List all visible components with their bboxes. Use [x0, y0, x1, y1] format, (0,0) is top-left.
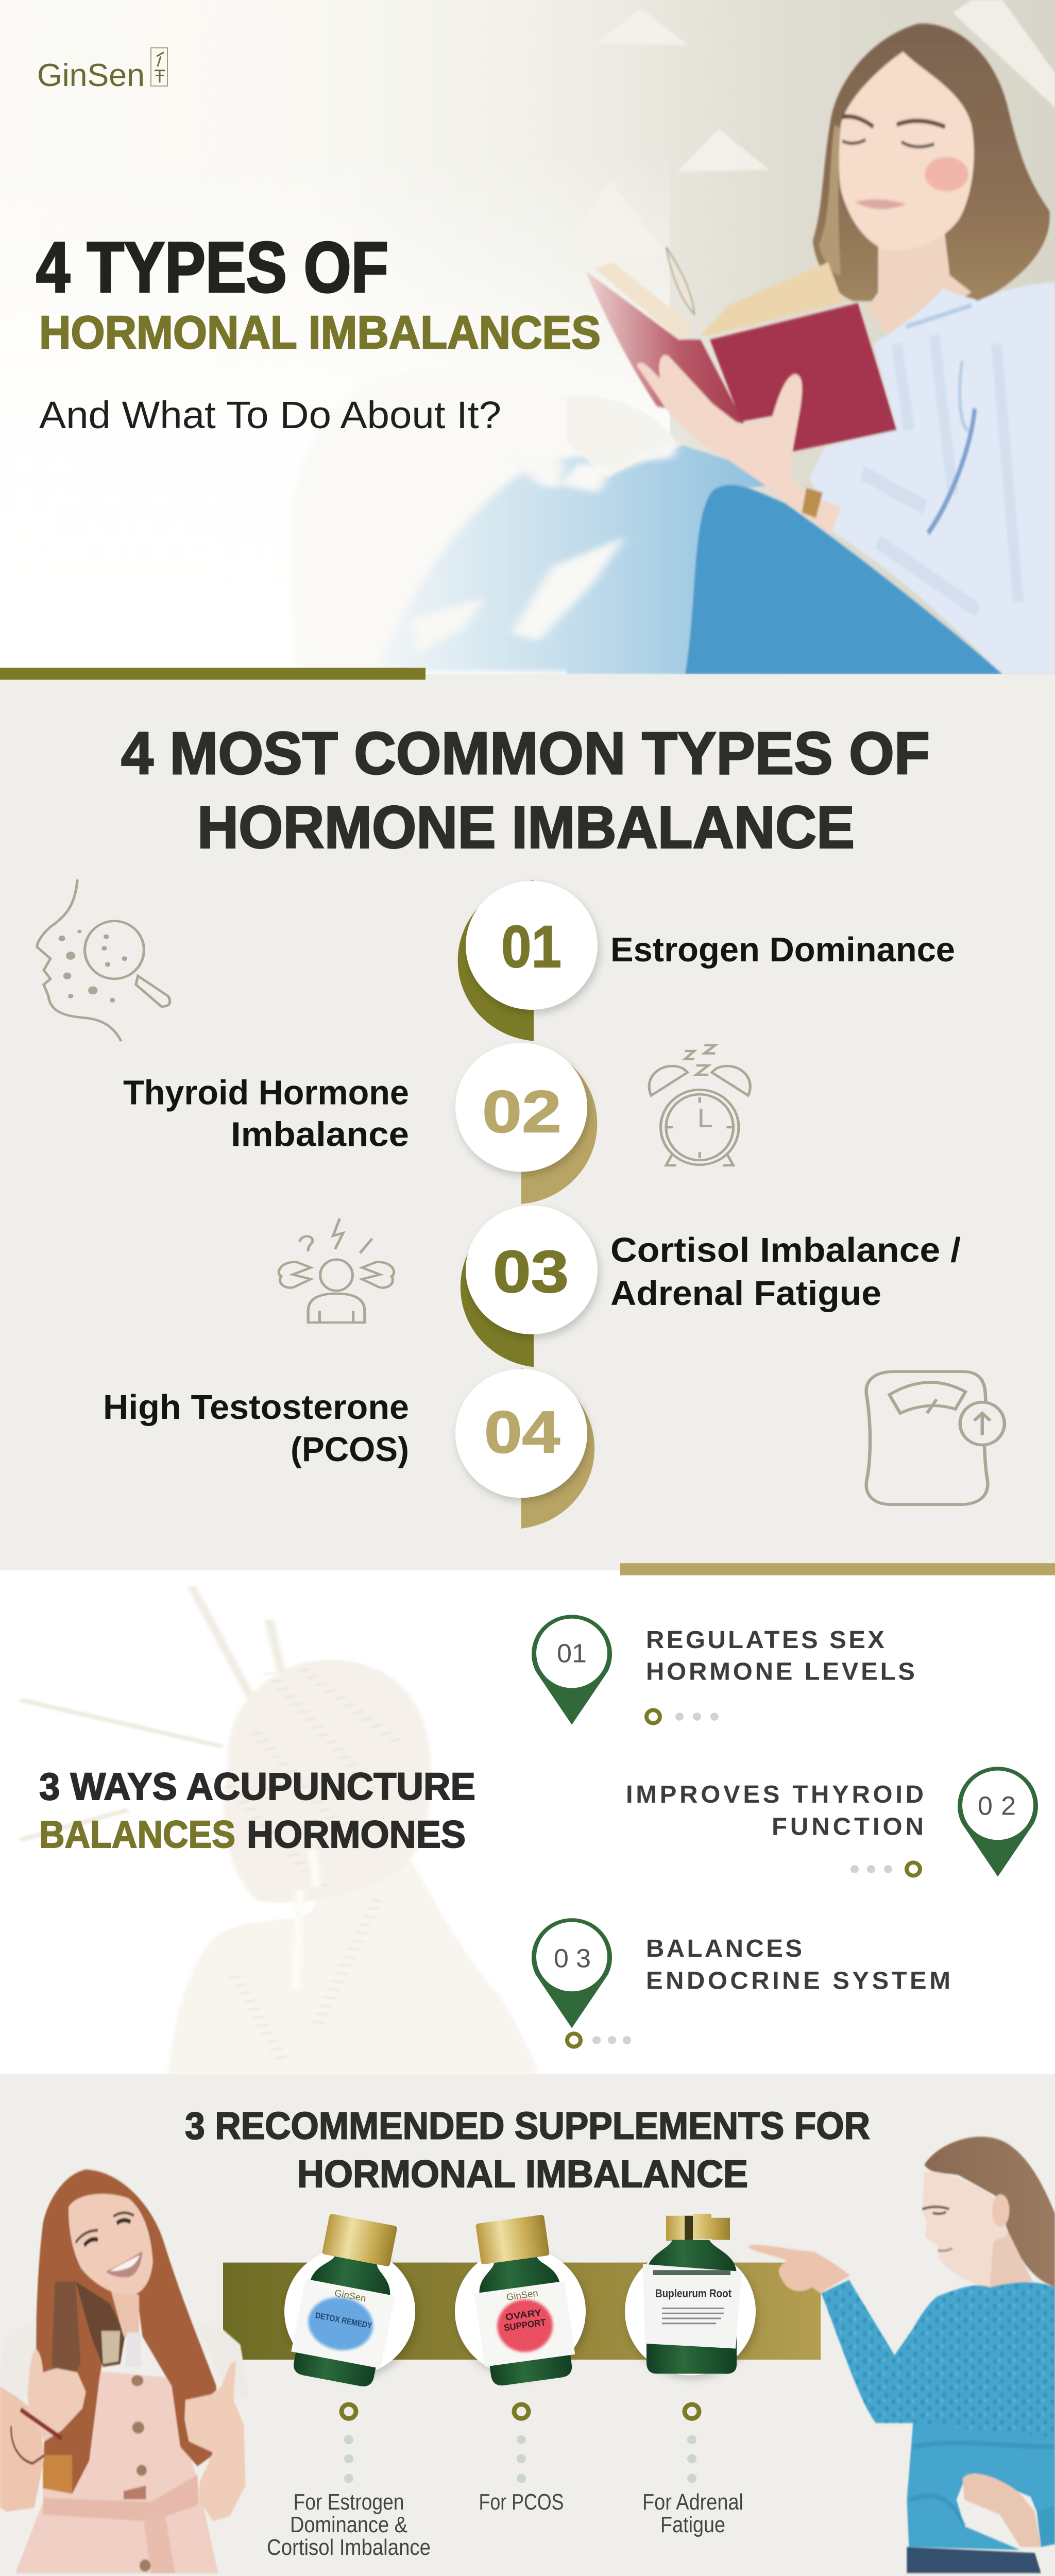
- step 01: [458, 880, 955, 1041]
- section heading: 3 RECOMMENDED SUPPLEMENTS FOR: [185, 2104, 870, 2147]
- section heading: HORMONES: [247, 1813, 466, 1856]
- brand logo: GinSen: [37, 58, 145, 93]
- section heading: [185, 2104, 870, 2195]
- pin 03: [532, 1918, 612, 2028]
- step 04: [103, 1368, 594, 1529]
- step 01: 01: [501, 913, 561, 980]
- markers and caption: for adrenal fatigue: For Adrenal: [642, 2490, 743, 2515]
- bar: hero accent: [0, 668, 426, 680]
- panel: four common types: [0, 674, 1055, 1570]
- step 02: 02: [482, 1078, 561, 1145]
- step 02: Imbalance: [231, 1115, 409, 1154]
- benefit 03: BALANCES: [646, 1935, 802, 1962]
- step 04: High Testosterone: [103, 1388, 409, 1427]
- brand logo: [37, 48, 167, 93]
- benefit 03: ENDOCRINE SYSTEM: [646, 1967, 950, 1994]
- photo: smiling woman thumbs up: [0, 2170, 249, 2573]
- product: ovary support: OVARY: [505, 2307, 542, 2323]
- pin 02: 02: [978, 1791, 1016, 1820]
- panel: acupuncture: [0, 1570, 1055, 2074]
- step 03: Cortisol Imbalance /: [610, 1231, 961, 1269]
- benefit 02: IMPROVES THYROID: [626, 1781, 924, 1808]
- photo: woman in blue sweater pointing: [748, 2137, 1055, 2573]
- benefit 02: [626, 1767, 1038, 1877]
- section heading: [39, 1765, 475, 1856]
- icon: stressed person: [279, 1218, 394, 1323]
- markers and caption: for estrogen dominance: Dominance &: [290, 2513, 407, 2537]
- markers and caption: for estrogen dominance: For Estrogen: [294, 2490, 404, 2515]
- step 03: 03: [493, 1238, 569, 1305]
- benefit 01: [532, 1615, 915, 1725]
- section heading: HORMONAL IMBALANCE: [297, 2153, 748, 2195]
- icon: alarm clock: [649, 1045, 750, 1165]
- benefit 01: HORMONE LEVELS: [646, 1658, 915, 1686]
- hero title: [36, 227, 601, 359]
- product: detox remedy: GinSen: [334, 2287, 367, 2304]
- step 04: 04: [484, 1399, 560, 1465]
- markers and caption: for adrenal fatigue: [642, 2404, 743, 2537]
- product: detox remedy: [284, 2211, 415, 2389]
- pin 01: [532, 1615, 612, 1725]
- benefit 01: REGULATES SEX: [646, 1626, 884, 1654]
- markers and caption: for estrogen dominance: [267, 2404, 431, 2560]
- pin 03: 03: [554, 1943, 591, 1973]
- step 04: (PCOS): [291, 1431, 409, 1469]
- pin 02: [958, 1767, 1038, 1877]
- hero title: HORMONAL IMBALANCES: [39, 307, 601, 359]
- photo: acupuncture head model: [20, 1586, 538, 2073]
- section heading: HORMONE IMBALANCE: [197, 794, 855, 860]
- pin 01: 01: [557, 1638, 587, 1668]
- product: bupleurum root: [625, 2214, 756, 2375]
- hero title: 4 TYPES OF: [36, 227, 388, 307]
- markers and caption: for adrenal fatigue: Fatigue: [660, 2513, 725, 2537]
- panel: hero: [0, 0, 1055, 675]
- step 02: Thyroid Hormone: [123, 1074, 409, 1112]
- step 03: [461, 1206, 961, 1367]
- markers and caption: for pcos: [479, 2404, 564, 2515]
- step 02: [123, 1043, 597, 1204]
- product: ovary support: GinSen: [505, 2287, 539, 2302]
- product: detox remedy: DETOX REMEDY: [315, 2310, 373, 2331]
- hero subtitle: And What To Do About It?: [39, 394, 501, 436]
- hero photo: woman reading a book: [0, 0, 1055, 675]
- icon: face with magnifier: [37, 879, 170, 1041]
- panel: supplements: [0, 2074, 1055, 2574]
- section heading: 3 WAYS ACUPUNCTURE: [39, 1765, 475, 1808]
- product band: [223, 2263, 821, 2360]
- bar: section accent: [620, 1563, 1055, 1575]
- product: ovary support: [455, 2213, 586, 2387]
- section heading: BALANCES: [39, 1813, 235, 1856]
- product: ovary support: SUPPORT: [503, 2317, 547, 2333]
- section heading: [121, 720, 930, 860]
- markers and caption: for estrogen dominance: Cortisol Imbalance: [267, 2535, 431, 2560]
- step 03: Adrenal Fatigue: [610, 1275, 881, 1313]
- benefit 03: [532, 1918, 950, 2047]
- markers and caption: for pcos: For PCOS: [479, 2490, 564, 2515]
- section heading: 4 MOST COMMON TYPES OF: [121, 720, 930, 787]
- step 01: Estrogen Dominance: [610, 931, 955, 969]
- product: bupleurum root: Bupleurum Root: [655, 2286, 731, 2300]
- icon: weighing scale: [866, 1371, 1005, 1504]
- benefit 02: FUNCTION: [772, 1813, 924, 1840]
